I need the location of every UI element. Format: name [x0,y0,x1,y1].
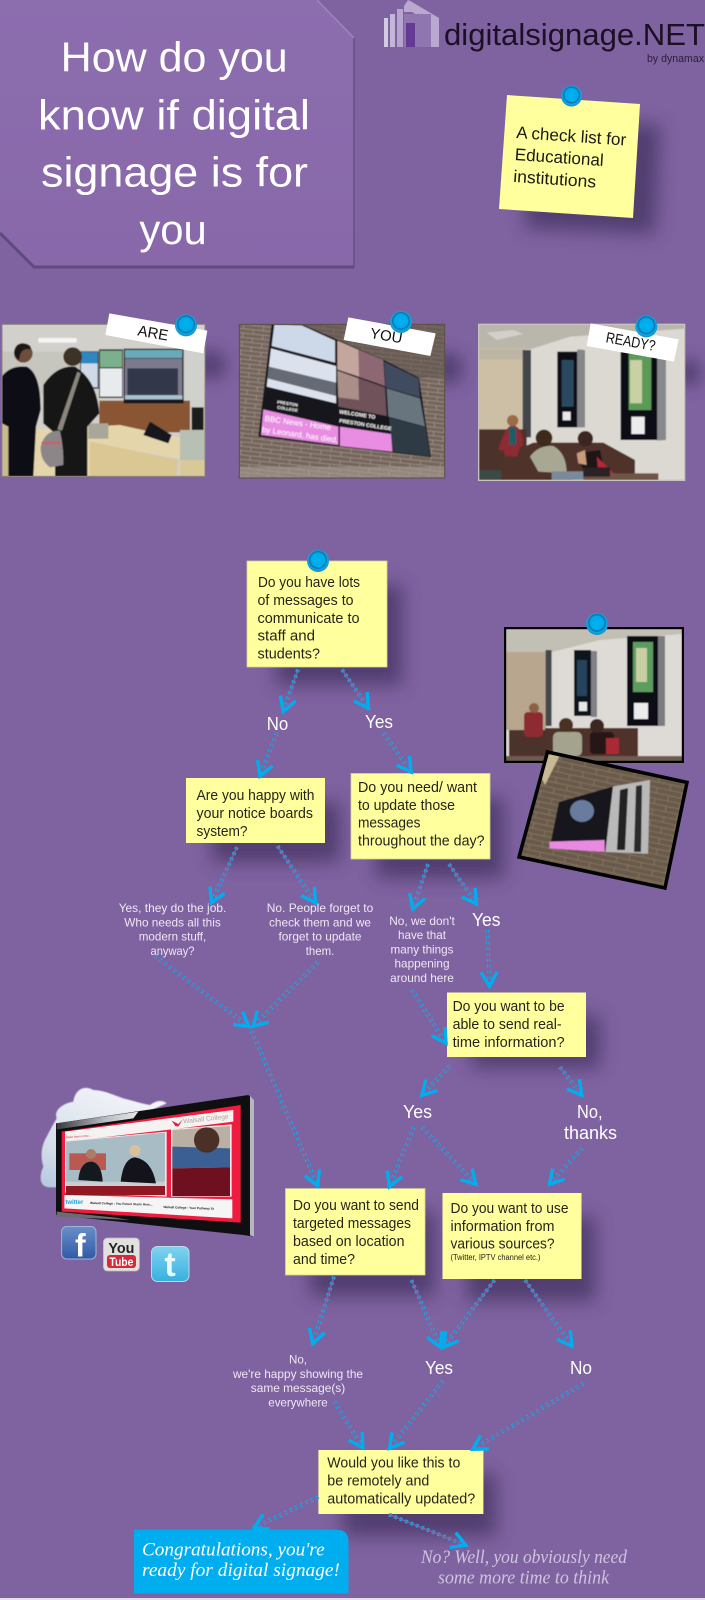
answer: not many things happening [389,914,455,985]
arrow: everywhere to remote note [334,1401,363,1449]
answer: people forget: forget to update [278,930,362,944]
answer labels: thanks [564,1123,617,1143]
title: signage is for [41,149,308,196]
cloud [41,1088,167,1213]
note text: staff and [258,628,315,644]
photo: YOU: BBC News - Home [264,414,332,432]
arrow: sources note to Yes [443,1280,495,1348]
video panel [65,1132,167,1197]
callout: congratulations: Congratulations, you're [142,1540,325,1560]
icon: pin [175,314,197,336]
note text: Do you want to be [453,998,565,1015]
arrow: targeted note to no [312,1277,334,1344]
photo: YOU: PRESTON [277,399,298,408]
note text: automatically updated? [327,1490,475,1508]
answer: not many things happening: around here [390,971,454,985]
sticky note: remotely updated [318,1450,496,1536]
arrow: Yes to targeted note [389,1127,414,1188]
arrow: remote note to more time [389,1514,467,1546]
note text: be remotely and [327,1472,429,1490]
answer: not many things happening: No, we don't [389,914,455,928]
note text: information from [450,1218,554,1235]
icon: YouTube [103,1238,139,1271]
answer labels: Yes [425,1358,453,1378]
icon: YouTube: Tube [109,1255,134,1269]
title: you [139,206,207,253]
note text: and time? [293,1251,355,1268]
image panel [171,1124,232,1197]
label: READY?: READY? [605,329,657,355]
note text: Are you happy with [196,787,314,804]
closing remark: more time to think: some more time to think [438,1568,610,1588]
closing remark: more time to think [420,1547,627,1588]
answer: people forget [267,901,374,958]
icon: Facebook [62,1226,96,1264]
answer labels: No [570,1358,592,1378]
tablet with cloud illustration: Walsall College : You Future Starts Here... [90,1201,153,1207]
note text: messages [358,814,420,832]
label: ARE [105,313,207,353]
answer: people forget: them. [306,944,334,958]
answer labels: Yes [472,910,500,930]
icon: pin [561,86,582,106]
note text: students? [258,646,320,662]
icon: Facebook: f [75,1228,86,1264]
arrow: merge to targeted note [252,1031,318,1186]
note text: targeted messages [293,1215,411,1232]
logo: digitalsignage.NET [384,0,705,65]
icon: pin [307,550,329,572]
answer: not many things happening: happening [394,957,450,971]
note text: to update those [358,797,455,814]
arrow: notice boards to people forget [278,846,316,904]
note text: Would you like this to [327,1455,460,1472]
note text: Educational [514,145,604,170]
answer: same messages everywhere: same message(s) [251,1381,345,1395]
label: ARE: ARE [136,322,170,345]
arrow: yes to real-time note [487,930,490,987]
arrow: people forget to merge [252,962,318,1027]
answer: No: No [267,714,288,734]
sticky note: notice boards [186,778,340,862]
sticky note: check list [499,86,660,234]
note text: Do you need/ want [358,779,478,796]
answer labels: Yes [403,1102,432,1122]
screen frame [56,1095,254,1237]
note text [196,787,314,840]
arrow: real-time note to Yes [421,1066,450,1096]
answer: they do the job [119,901,226,958]
note text: various sources? [450,1236,554,1253]
tablet with cloud illustration: twitter [65,1200,84,1206]
answer labels: No, [577,1102,602,1122]
answer labels: Yes [365,712,393,732]
note text: of messages to [258,592,354,609]
photo: YOU: COLLEGE [277,405,298,413]
note text [450,1200,568,1262]
icon: pin [635,315,657,337]
note text: communicate to [258,610,360,627]
photo: YOU [239,311,463,478]
note text: able to send real- [453,1016,562,1033]
note text [327,1455,475,1508]
icon: YouTube: You [108,1240,134,1257]
label: YOU [344,311,436,356]
icon: pin [586,613,608,635]
title [38,34,310,253]
note text: time information? [453,1034,565,1051]
answer: not many things happening: many things [390,942,454,956]
sticky note: various sources [442,1193,595,1301]
note text [453,998,565,1051]
answer: same messages everywhere: everywhere [268,1396,328,1410]
photo: YOU: PRESTON COLLEGE [339,418,392,433]
title: How do you [61,34,288,81]
arrow: no to real-time note [412,990,446,1044]
note text: your notice boards [196,805,313,822]
note text: Do you want to use [450,1200,568,1217]
note text: Do you have lots [258,574,360,591]
label: YOU: YOU [369,325,404,347]
answer: same messages everywhere [232,1352,363,1410]
answer: they do the job: Yes, they do the job. [119,901,226,915]
answer: not many things happening: have that [398,928,447,942]
sticky note: lots of messages [247,550,402,685]
answer labels [267,712,617,1378]
arrow: real-time note to No thanks [560,1067,582,1096]
note text: system? [196,823,248,840]
note text [358,779,484,850]
arrow: remote note to congratulations [253,1497,318,1528]
photo: lounge with screens [504,613,684,763]
arrow: first note to Yes [342,670,369,709]
callout: congratulations: ready for digital signage! [142,1560,340,1581]
photo: YOU: by Leonard, has died, [261,425,339,445]
closing remark: more time to think: No? Well, you obviously need [420,1547,627,1568]
arrow: first note to No [283,670,298,712]
note text [513,123,627,193]
arrow: No to remote note [472,1383,584,1450]
arrow: update note to no [412,864,428,910]
answer: they do the job: anyway? [150,944,195,958]
tablet with cloud illustration [41,1088,254,1237]
note text: (Twitter, IPTV channel etc.) [450,1253,541,1262]
tablet with cloud illustration: Walsall College [183,1114,229,1125]
arrow: Yes to remote note [389,1381,443,1449]
arrow: notice boards to they do the job [211,847,237,904]
photo: ARE [2,313,227,477]
logo: digitalsignage.NET: digitalsignage.NET [444,17,705,52]
arrow: Yes to update note [384,733,412,773]
arrow: sources note to No [525,1280,572,1347]
answer: they do the job: Who needs all this [124,915,221,929]
icon: Twitter: t [164,1246,176,1284]
icon: pin [390,311,412,333]
sticky note: update throughout the day [351,774,504,878]
arrow: they do the job to merge [155,956,250,1027]
title: know if digital [38,91,310,138]
note text: institutions [513,167,597,192]
photo: YOU: WELCOME TO [339,409,376,421]
answer: people forget: No. People forget to [267,901,374,915]
arrow: No thanks to sources note [549,1148,582,1185]
arrow: update note to yes [449,864,477,905]
note text: A check list for [516,123,627,149]
photo: READY? [478,315,702,481]
arrow: No to notice boards [260,733,277,777]
tablet with cloud illustration: Make them in the... [66,1134,92,1139]
ticker band [64,1195,232,1218]
answer: same messages everywhere: we're happy showing the [232,1367,363,1381]
label: READY? [587,315,679,362]
tablet with cloud illustration: Walsall College : Your Pathway St [163,1205,215,1211]
sticky note: targeted messages [286,1189,435,1296]
photo: brick wall with screens [516,750,689,890]
callout: congratulations [134,1530,348,1593]
answer: people forget: check them and we [269,915,371,929]
answer: they do the job: modern stuff, [139,930,206,944]
note text: throughout the day? [358,832,484,850]
logo: digitalsignage.NET: by dynamax [647,53,704,65]
arrow: targeted note to Yes [411,1280,441,1348]
title panel [0,0,354,267]
note text: based on location [293,1233,404,1250]
arrow: Yes to sources note [422,1127,477,1185]
icon: Twitter [152,1246,189,1284]
note text [293,1197,419,1268]
answer: same messages everywhere: No, [289,1352,307,1366]
note text [258,574,360,662]
sticky note: real-time information [447,992,600,1068]
note text: Do you want to send [293,1197,419,1214]
